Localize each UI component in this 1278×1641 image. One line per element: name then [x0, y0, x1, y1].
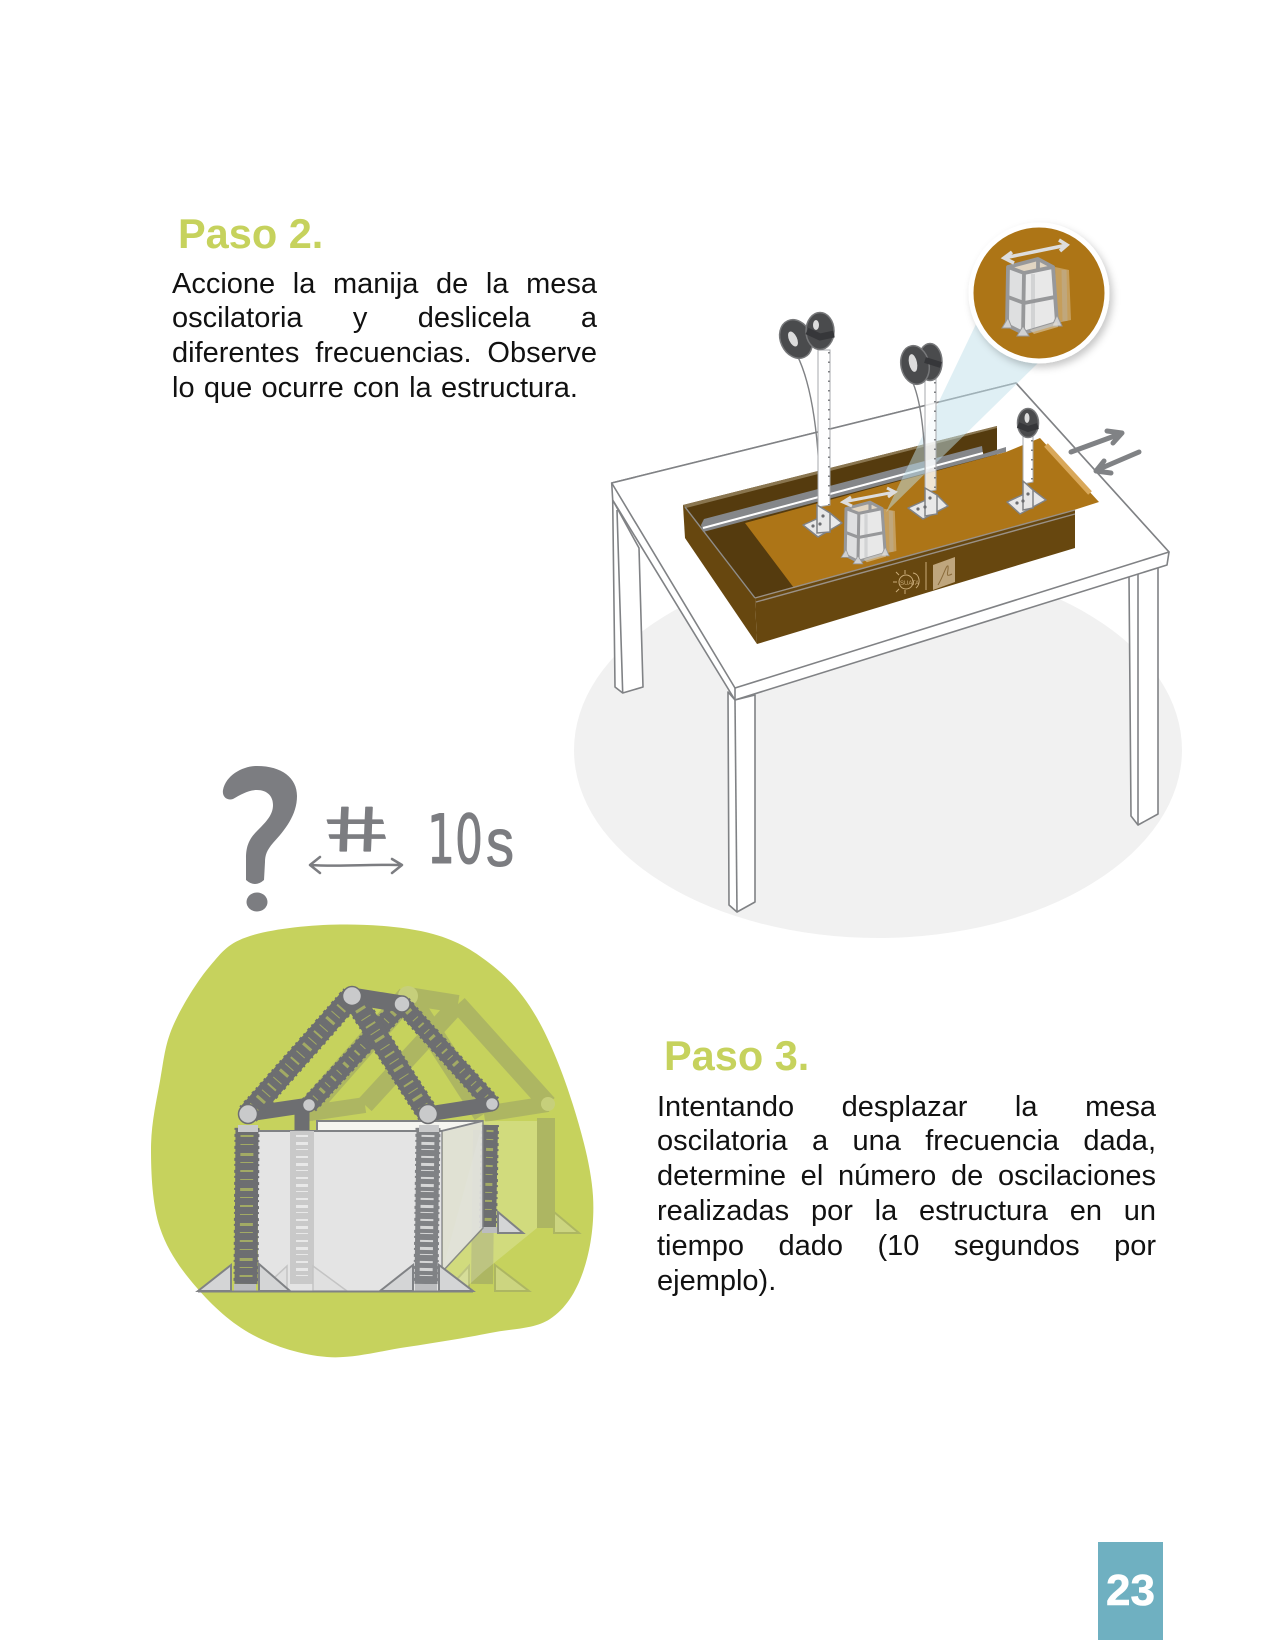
ten seconds label: s [486, 805, 514, 881]
rear frame bars [309, 1004, 492, 1105]
tray logo [893, 557, 955, 594]
small structure on tray [841, 488, 896, 564]
page number: 23 [1106, 1566, 1155, 1615]
text block: paso 3 [657, 1090, 1156, 1297]
front panel [258, 1131, 442, 1291]
joints [238, 986, 498, 1132]
side panel [442, 1121, 483, 1291]
callout circle [971, 225, 1107, 361]
oscillating tray [683, 426, 1099, 644]
base line [198, 1290, 473, 1292]
main structure [198, 986, 523, 1292]
rear left leg upper [294, 1108, 310, 1131]
text block: paso 2: oscilatoria y deslicela a [172, 302, 597, 334]
left stand with weights [773, 312, 842, 537]
text block: paso 3: Intentando desplazar la mesa [657, 1090, 1156, 1122]
ghost structure [304, 986, 579, 1291]
rear right leg [482, 1125, 523, 1233]
text block: paso 3: tiempo dado (10 segundos por [657, 1230, 1156, 1262]
heading: paso 2: Paso 2. [178, 210, 323, 257]
panel top edge [258, 1130, 442, 1132]
double arrow [310, 857, 402, 873]
table [612, 383, 1169, 912]
right stand with weight [1007, 408, 1046, 514]
ghost side panel [442, 1121, 537, 1291]
motion arrows [1071, 431, 1139, 473]
text block: paso 3: oscilatoria a una frecuencia dada, [657, 1125, 1156, 1157]
ten seconds label: 10 [427, 801, 483, 880]
text block: paso 2: diferentes frecuencias. Observe [172, 337, 597, 369]
hash symbol: # [316, 793, 397, 865]
heading: paso 3: Paso 3. [664, 1032, 809, 1079]
top rim panel [317, 1121, 483, 1131]
question mark [223, 766, 297, 912]
text block: paso 2 [172, 268, 597, 404]
green blob [151, 924, 593, 1357]
text block: paso 2: lo que ocurre con la estructura. [172, 372, 578, 404]
centre stand with weights [897, 343, 948, 519]
callout beam [886, 322, 1038, 512]
text block: paso 3: realizadas por la estructura en un [657, 1195, 1156, 1227]
front right leg [380, 1128, 473, 1292]
front left leg [198, 1128, 290, 1292]
floor shadow [574, 562, 1182, 938]
page number [1098, 1542, 1163, 1640]
text block: paso 3: determine el número de oscilaciones [657, 1160, 1156, 1192]
text block: paso 2: Accione la manija de la mesa [172, 268, 597, 300]
front frame bars [248, 996, 492, 1114]
text block: paso 3: ejemplo). [657, 1265, 776, 1297]
pale rear left leg [260, 1131, 347, 1291]
tray logo: SUATA [900, 581, 919, 587]
